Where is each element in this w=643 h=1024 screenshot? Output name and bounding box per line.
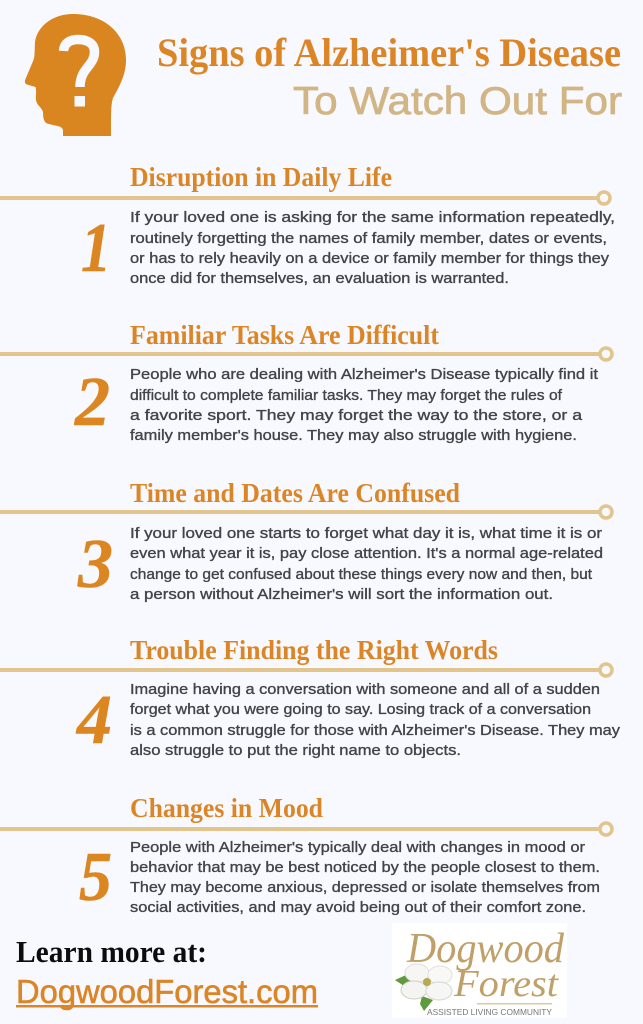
body text: sign 1: once did for themselves, an evaluation is warranted.	[130, 270, 509, 287]
body text: sign 4: forget what you were going to say. Losing track of a conversation	[130, 701, 591, 718]
body text: sign 3: If your loved one starts to forget what day it is, what time it is or	[130, 525, 602, 542]
body text: sign 2: People who are dealing with Alzheimer's Disease typically find it	[130, 366, 599, 383]
body text: sign 1: or has to rely heavily on a device or family member for things they	[130, 250, 609, 267]
panel: sign 3	[0, 478, 612, 603]
body text: sign 5: social activities, and may avoid being out of their comfort zone.	[130, 899, 586, 916]
body text: sign 1: routinely forgetting the names of family member, dates or events,	[130, 230, 607, 247]
divider with end circle: sign 2	[0, 348, 612, 360]
body text: sign 5: People with Alzheimer's typically deal with changes in mood or	[130, 839, 585, 856]
divider with end circle: sign 4	[0, 664, 612, 676]
panel: sign 4	[0, 635, 620, 759]
title: Signs of Alzheimer's Disease	[157, 30, 621, 75]
body text: sign 5: behavior that may be best noticed by the people closest to them.	[130, 859, 600, 876]
body text: sign 1	[130, 209, 615, 287]
number 5: 5	[79, 839, 112, 916]
heading: sign 4: Trouble Finding the Right Words	[130, 635, 498, 665]
body text: sign 1: If your loved one is asking for the same information repeatedly,	[130, 209, 615, 226]
panel: sign 1	[0, 162, 615, 287]
body text: sign 2	[130, 366, 599, 444]
logo: Dogwood Forest	[392, 923, 567, 1018]
number 2: 2	[74, 364, 110, 441]
icon: dogwood flower	[395, 964, 452, 1011]
number 1: 1	[81, 210, 111, 287]
body text: sign 4: is a common struggle for those with Alzheimer's Disease. They may	[130, 722, 620, 739]
logo: Dogwood Forest: Forest	[453, 963, 560, 1005]
body text: sign 3: a person without Alzheimer's will sort the information out.	[130, 586, 553, 603]
heading: sign 5: Changes in Mood	[130, 793, 323, 823]
divider with end circle: sign 1	[0, 192, 610, 204]
body text: sign 4: Imagine having a conversation with someone and all of a sudden	[130, 681, 600, 698]
panel: sign 5	[0, 793, 612, 916]
body text: sign 4: also struggle to put the right name to objects.	[130, 742, 461, 759]
logo: Dogwood Forest: Dogwood	[406, 926, 565, 972]
number 4: 4	[75, 682, 112, 759]
body text: sign 3: change to get confused about these things every now and then, but	[130, 566, 593, 583]
heading: sign 2: Familiar Tasks Are Difficult	[130, 320, 439, 350]
body text: sign 2: difficult to complete familiar tasks. They may forget the rules of	[130, 387, 563, 404]
heading: sign 1: Disruption in Daily Life	[130, 162, 392, 192]
body text: sign 3	[130, 525, 603, 603]
body text: sign 2: family member's house. They may also struggle with hygiene.	[130, 427, 577, 444]
divider with end circle: sign 5	[0, 823, 612, 835]
call to action: learn more: Learn more at:	[16, 934, 207, 969]
body text: sign 3: even what year it is, pay close attention. It's a normal age-related	[130, 545, 603, 562]
body text: sign 2: a favorite sport. They may forget the way to the store, or a	[130, 407, 583, 424]
body text: sign 5	[130, 839, 600, 916]
logo: Dogwood Forest: ASSISTED LIVING COMMUNITY	[427, 1007, 552, 1017]
website link: DogwoodForest.com	[16, 973, 318, 1010]
panel: sign 2	[0, 320, 612, 444]
divider with end circle: sign 3	[0, 506, 612, 518]
body text: sign 4	[130, 681, 620, 759]
heading: sign 3: Time and Dates Are Confused	[130, 478, 460, 508]
number 3: 3	[77, 526, 113, 603]
icon: head with question mark	[25, 14, 126, 136]
subtitle: To Watch Out For	[293, 80, 622, 123]
body text: sign 5: They may become anxious, depressed or isolate themselves from	[130, 879, 600, 896]
